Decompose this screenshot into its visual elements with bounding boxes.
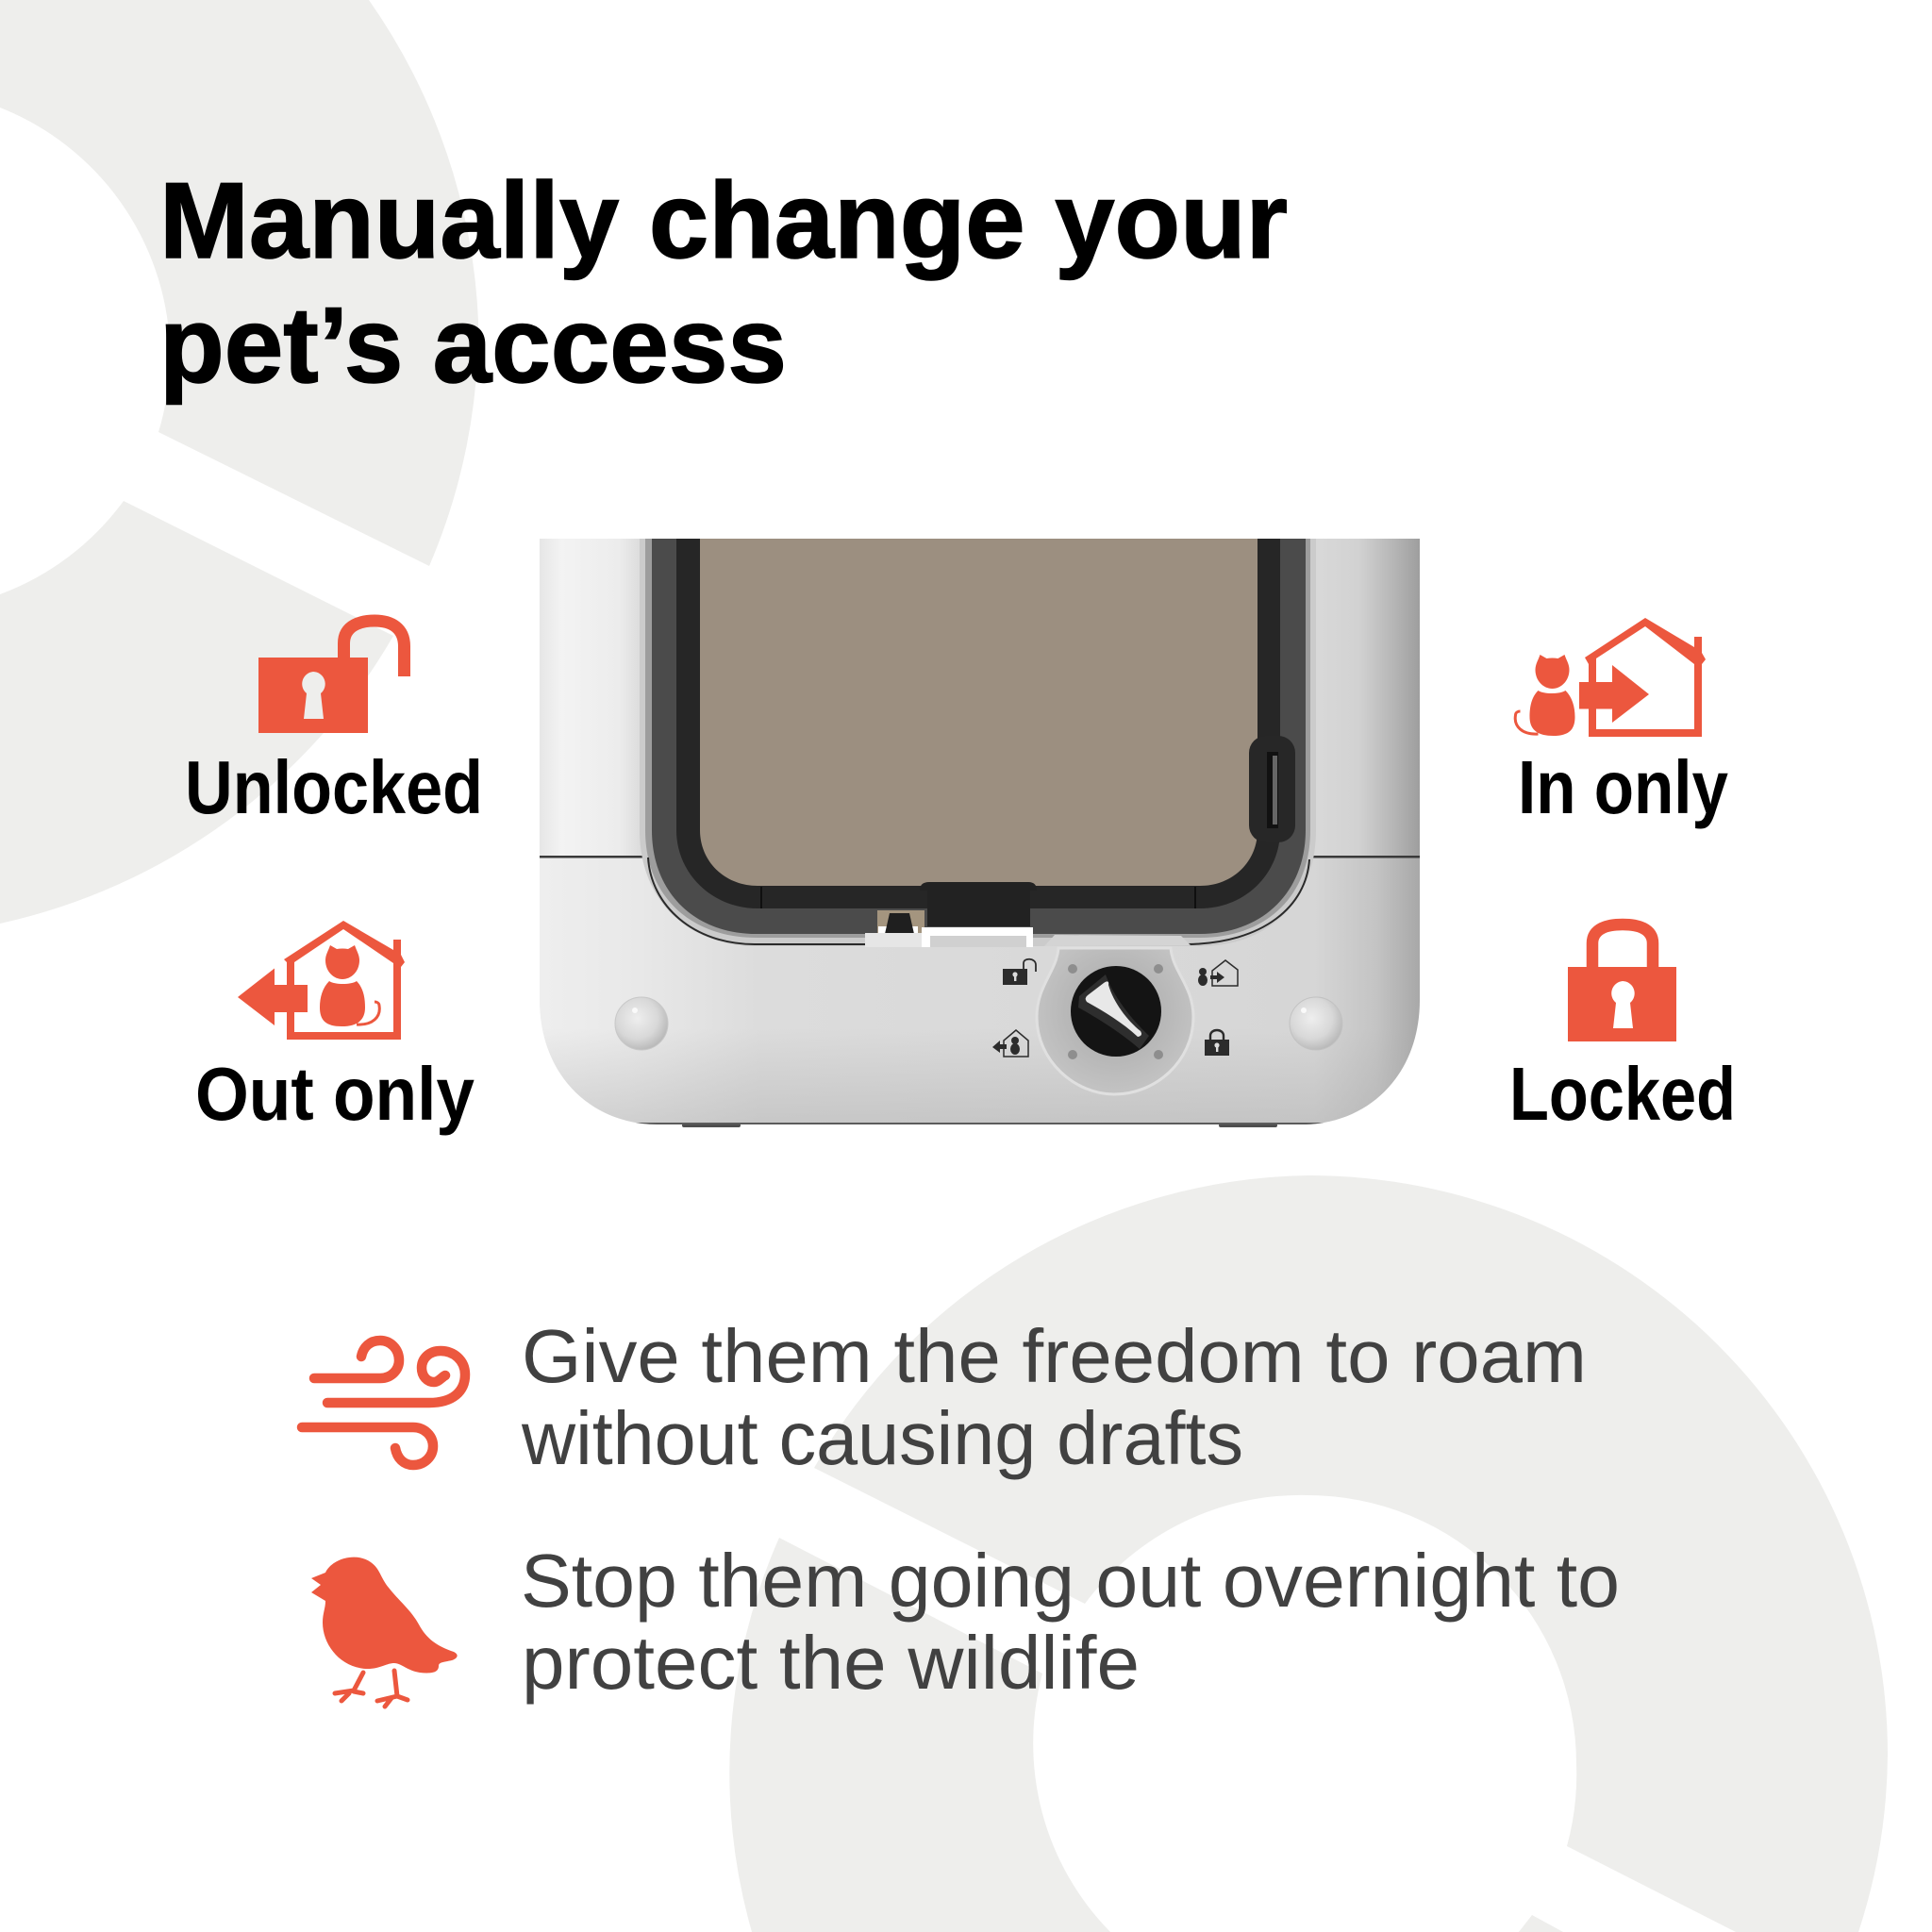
door surround xyxy=(640,539,1316,946)
title: pet’s access xyxy=(159,286,787,406)
text: drafts benefit xyxy=(521,1314,1587,1480)
outer frame line xyxy=(648,858,1309,944)
text: wildlife benefit: Stop them going out overnight to xyxy=(521,1539,1620,1623)
text: wildlife benefit xyxy=(521,1539,1620,1705)
icon: out only house with cat xyxy=(238,921,405,1040)
label: Out only: Out only xyxy=(195,1052,475,1136)
label: Locked: Locked xyxy=(1509,1052,1736,1136)
door feet xyxy=(682,1124,1277,1127)
product photo: cat flap door xyxy=(540,539,1420,1127)
centre clip and slider xyxy=(865,882,1191,947)
icon: wind xyxy=(302,1341,465,1465)
background: logo ring top left xyxy=(0,0,478,924)
left bumper xyxy=(615,997,668,1050)
background: logo ring bottom right xyxy=(729,1175,1888,1932)
door body xyxy=(540,539,1420,1125)
right bumper xyxy=(1290,997,1342,1050)
icon: in only house with cat xyxy=(1515,618,1706,737)
dial icon: out only xyxy=(992,1030,1028,1057)
rotary knob xyxy=(1071,966,1161,1057)
rotary selector plate xyxy=(1037,948,1193,1094)
title: Manually change your xyxy=(159,161,1288,281)
text: wildlife benefit: protect the wildlife xyxy=(522,1621,1140,1705)
title xyxy=(159,161,1288,406)
right latch tab xyxy=(1249,736,1295,842)
black gasket xyxy=(676,539,1280,908)
plate screws xyxy=(1068,964,1163,1059)
dial icon: in only xyxy=(1198,960,1238,986)
gasket joints xyxy=(760,887,1196,908)
dial icon: unlocked xyxy=(1003,959,1036,985)
icon: unlocked padlock xyxy=(258,621,404,733)
brush seal xyxy=(652,539,1306,934)
flap pane xyxy=(700,539,1257,886)
icon: locked padlock xyxy=(1568,924,1676,1041)
surround inner band xyxy=(645,539,1310,938)
label: In only: In only xyxy=(1518,745,1728,829)
text: drafts benefit: Give them the freedom to roam xyxy=(522,1314,1587,1398)
dial icon: locked xyxy=(1205,1030,1229,1056)
label: Unlocked: Unlocked xyxy=(185,745,483,829)
icon: bird xyxy=(311,1557,458,1707)
text: drafts benefit: without causing drafts xyxy=(521,1396,1243,1480)
